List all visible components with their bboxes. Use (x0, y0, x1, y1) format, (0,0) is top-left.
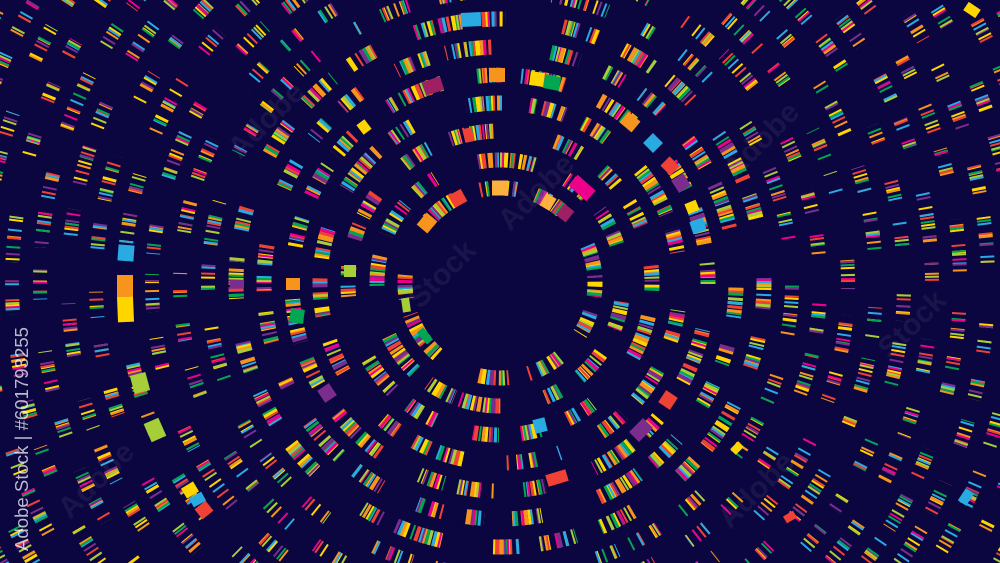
ring 3 (301, 84, 699, 482)
ring 2 (340, 123, 660, 443)
ring 5 (219, 2, 781, 563)
vertical stock credit text: Adobe Stock | #601793255 (11, 327, 32, 551)
faint stock watermarks: Adobe (492, 148, 581, 237)
central empty hole (415, 198, 585, 368)
ring 1 (367, 150, 633, 416)
faint stock watermarks: Adobe (222, 76, 311, 165)
faint stock watermarks: Stock (872, 284, 953, 365)
large highlighted gene blocks (125, 6, 978, 520)
ring 7 (164, 0, 836, 563)
ring 6 (184, 0, 816, 563)
faint stock watermarks (52, 76, 953, 535)
faint stock watermarks: Adobe (712, 446, 801, 535)
faint stock watermarks: Stock (402, 234, 483, 315)
faint stock watermarks: Adobe (717, 96, 806, 185)
ring 8 (103, 0, 897, 563)
faint stock watermarks: Adobe (52, 436, 141, 525)
ring 4 (271, 54, 729, 512)
